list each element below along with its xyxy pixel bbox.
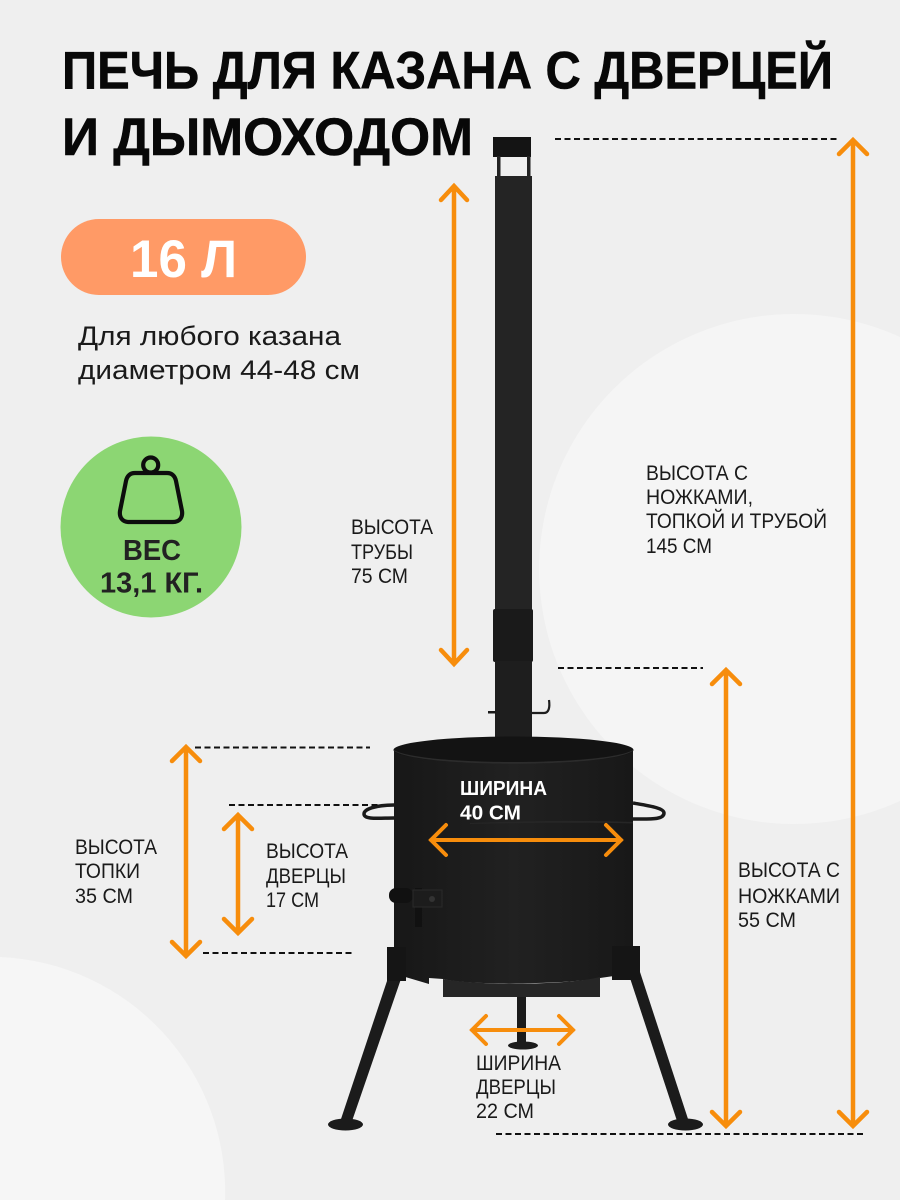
label: height with legs: НОЖКАМИ — [738, 885, 840, 908]
label: total height: ВЫСОТА С — [646, 462, 748, 485]
label: chimney height: 75 СМ — [351, 565, 408, 588]
chimney — [488, 137, 549, 739]
label: door width: ШИРИНА — [476, 1052, 561, 1075]
weight badge: ВЕС — [123, 535, 181, 567]
label: chimney height: ТРУБЫ — [351, 541, 413, 564]
stove width label: 40 СМ — [460, 802, 521, 824]
label: firebox height — [75, 836, 157, 908]
volume badge: 16 Л — [130, 230, 237, 289]
body — [394, 750, 633, 984]
stove width label — [460, 778, 547, 824]
description: Для любого казана — [78, 321, 342, 351]
icon: weight — [120, 458, 182, 522]
label: total height: НОЖКАМИ, — [646, 486, 753, 509]
labels — [75, 462, 840, 1123]
arrows — [172, 140, 867, 1126]
weight badge — [60, 436, 242, 618]
label: door height: ВЫСОТА — [266, 840, 348, 863]
label: total height: 145 СМ — [646, 535, 712, 558]
stove: chimney, body, legs — [328, 137, 703, 1130]
title — [62, 40, 833, 167]
title: И ДЫМОХОДОМ — [62, 108, 473, 167]
label: door height — [266, 840, 348, 912]
arrow: door width — [472, 1016, 573, 1044]
label: door height: ДВЕРЦЫ — [266, 865, 346, 888]
dashed guides — [195, 139, 865, 1134]
stove width label: ШИРИНА — [460, 778, 547, 800]
arrow: door height — [224, 815, 252, 933]
handles — [364, 805, 394, 818]
title: ПЕЧЬ ДЛЯ КАЗАНА С ДВЕРЦЕЙ — [62, 40, 833, 100]
label: chimney height — [351, 516, 433, 588]
label: firebox height: ВЫСОТА — [75, 836, 157, 859]
label: firebox height: 35 СМ — [75, 885, 133, 908]
arrow: stove width — [431, 825, 621, 855]
label: door height: 17 СМ — [266, 889, 319, 912]
volume badge — [61, 219, 306, 295]
label: height with legs: ВЫСОТА С — [738, 859, 840, 882]
label: door width — [476, 1052, 561, 1123]
description: диаметром 44-48 см — [78, 355, 360, 385]
arrow: firebox height — [172, 747, 200, 956]
label: height with legs: 55 СМ — [738, 909, 796, 932]
arrow: height with legs — [712, 670, 740, 1126]
weight badge: 13,1 КГ. — [100, 568, 203, 600]
label: total height: ТОПКОЙ И ТРУБОЙ — [646, 509, 827, 533]
description — [78, 321, 360, 385]
label: total height — [646, 462, 827, 558]
label: height with legs — [738, 859, 840, 932]
arrow: total height — [839, 140, 867, 1126]
label: door width: ДВЕРЦЫ — [476, 1076, 556, 1099]
label: door width: 22 СМ — [476, 1100, 534, 1123]
legs — [328, 972, 703, 1130]
label: chimney height: ВЫСОТА — [351, 516, 433, 539]
arrow: chimney height — [441, 186, 467, 664]
label: firebox height: ТОПКИ — [75, 860, 140, 883]
door latch — [389, 888, 442, 927]
